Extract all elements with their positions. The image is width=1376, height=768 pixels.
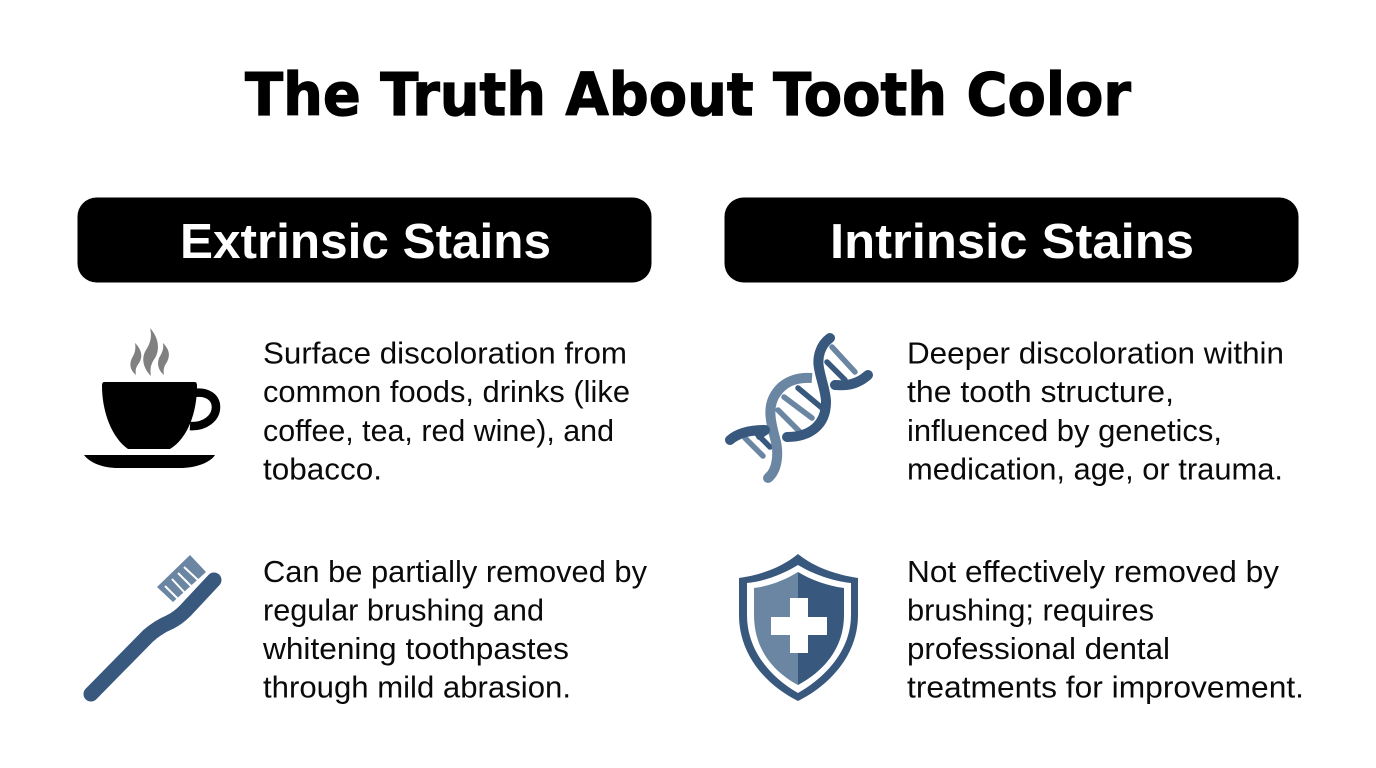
text: surface discoloration: tobacco. [263,452,382,486]
text: partial removal: through mild abrasion. [263,670,571,704]
icon: shield with cross [739,554,858,701]
text: partial removal [262,555,648,704]
text: professional treatment: treatments for improvement. [907,670,1304,704]
text: partial removal: Can be partially removed by [263,555,648,589]
heading: extrinsic stains: Extrinsic Stains [180,215,551,269]
text: surface discoloration: coffee, tea, red wine), and [263,414,614,448]
text: partial removal: regular brushing and [263,594,544,628]
text: professional treatment: professional dental [907,632,1170,666]
heading: intrinsic stains [724,198,1298,282]
text: professional treatment: brushing; requires [907,594,1154,628]
panel: extrinsic stains [78,198,652,704]
heading: intrinsic stains: Intrinsic Stains [830,215,1194,269]
text: deeper discoloration [907,336,1284,486]
text: surface discoloration: common foods, drinks (like [263,375,630,409]
title: The Truth About Tooth Color [245,60,1131,129]
icon: coffee cup [84,328,216,468]
icon: toothbrush [91,555,214,694]
text: deeper discoloration: medication, age, or trauma. [907,452,1283,486]
panel: intrinsic stains [724,198,1304,704]
text: surface discoloration: Surface discoloration from [263,336,627,370]
text: surface discoloration [263,336,630,486]
text: deeper discoloration: influenced by genetics, [907,414,1222,448]
heading: extrinsic stains [78,198,652,282]
icon: dna helix [730,338,868,483]
text: professional treatment: Not effectively removed by [907,555,1280,589]
text: partial removal: whitening toothpastes [262,632,569,666]
text: deeper discoloration: Deeper discoloration within [907,336,1284,370]
text: professional treatment [907,555,1304,704]
text: deeper discoloration: the tooth structure, [907,375,1174,409]
